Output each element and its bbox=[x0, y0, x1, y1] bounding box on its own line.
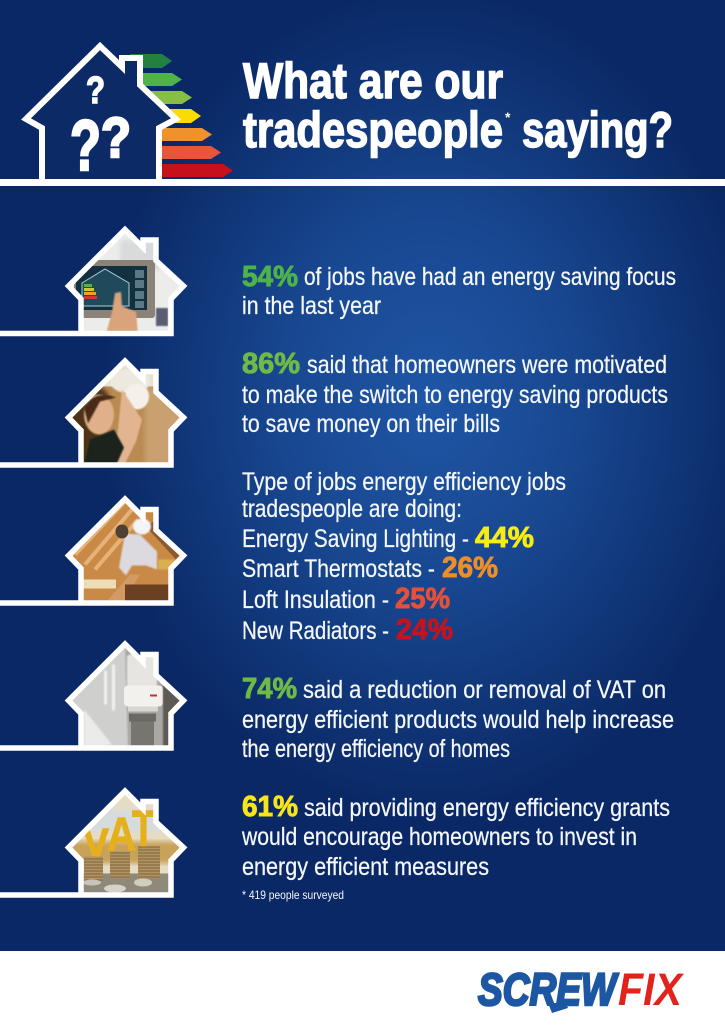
house photo: woman changing light bulb bbox=[0, 356, 190, 466]
stat: 74%: the energy efficiency of homes bbox=[242, 735, 510, 763]
photo bbox=[72, 503, 180, 600]
stat: 61%: energy efficient measures bbox=[242, 853, 489, 881]
title: * bbox=[505, 109, 511, 125]
job types list: Loft Insulation - bbox=[242, 586, 389, 614]
stat: 54%: in the last year bbox=[242, 292, 381, 320]
photo: A bbox=[107, 808, 136, 860]
photo bbox=[72, 234, 180, 331]
stat: 86%: said that homeowners were motivated bbox=[307, 351, 667, 379]
photo: T bbox=[132, 800, 155, 858]
question marks: ? bbox=[86, 70, 105, 112]
job types list: Smart Thermostats - bbox=[242, 555, 435, 583]
footer band bbox=[0, 951, 725, 1026]
title bbox=[243, 53, 673, 158]
job types list: Energy Saving Lighting - bbox=[242, 525, 469, 553]
stat: 74%: 74% bbox=[242, 673, 297, 705]
stat: 86%: 86% bbox=[242, 348, 300, 380]
screwfix logo: SCREW bbox=[478, 964, 619, 1015]
stat: 61%: said providing energy efficiency grants bbox=[304, 794, 670, 822]
job types list: 24% bbox=[396, 614, 453, 646]
question marks bbox=[70, 70, 131, 186]
stat: 61% bbox=[241, 791, 670, 881]
stat: 61%: would encourage homeowners to invest in bbox=[241, 823, 637, 851]
job types list: 25% bbox=[395, 583, 450, 615]
title: What are our bbox=[243, 53, 503, 109]
footnote: * 419 people surveyed bbox=[242, 888, 344, 902]
stat: 61%: 61% bbox=[242, 791, 298, 823]
question marks: ? bbox=[101, 106, 131, 170]
photo bbox=[72, 365, 180, 462]
photo bbox=[72, 648, 180, 746]
house outline and line bbox=[0, 230, 184, 334]
house photo: VAT letters on coins bbox=[0, 786, 190, 898]
stat: 74% bbox=[242, 673, 674, 763]
house outline and line bbox=[0, 361, 184, 465]
stat: 86% bbox=[242, 348, 668, 438]
job types list bbox=[242, 468, 566, 646]
question marks: ? bbox=[70, 107, 101, 186]
job types list: 26% bbox=[442, 552, 498, 584]
house outline and line bbox=[0, 644, 184, 748]
stat: 74%: said a reduction or removal of VAT on bbox=[303, 676, 666, 704]
stat: 54%: 54% bbox=[242, 261, 298, 293]
house outline and line bbox=[0, 499, 184, 603]
job types list: tradespeople are doing: bbox=[242, 495, 462, 523]
job types list: Type of jobs energy efficiency jobs bbox=[242, 468, 566, 496]
house outline and line bbox=[0, 791, 184, 895]
base line bbox=[0, 179, 725, 186]
house photo: loft insulation worker bbox=[0, 494, 190, 604]
energy rating bars bbox=[130, 54, 233, 177]
title: saying? bbox=[522, 102, 673, 158]
stat: 86%: to save money on their bills bbox=[242, 410, 500, 438]
job types list: New Radiators - bbox=[242, 617, 389, 645]
title: tradespeople bbox=[243, 102, 503, 158]
photo bbox=[72, 795, 180, 892]
house outline bbox=[26, 46, 176, 183]
house photo: smart home tablet bbox=[0, 225, 190, 335]
header house with question marks bbox=[0, 46, 725, 186]
stat: 54% bbox=[242, 261, 676, 320]
job types list: 44% bbox=[475, 522, 534, 554]
photo: V bbox=[83, 820, 109, 866]
screwfix logo: FIX bbox=[618, 964, 685, 1015]
house photo: radiator valve bbox=[0, 640, 190, 750]
